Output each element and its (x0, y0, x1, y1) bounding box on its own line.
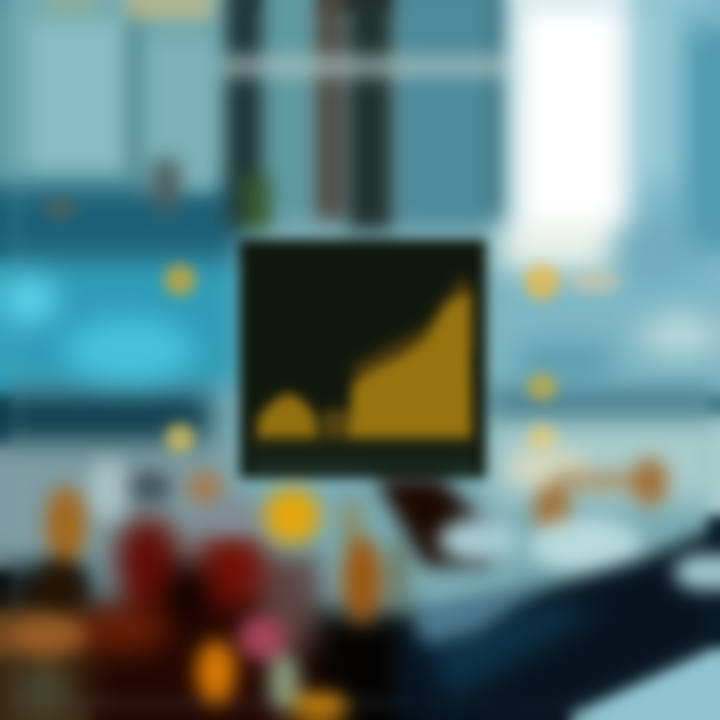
laptop (395, 525, 720, 720)
stand of chart screen (375, 478, 490, 566)
bottom left: colourful blurred objects (0, 516, 420, 720)
chart baseline (250, 442, 476, 448)
yellow markers (44, 198, 621, 453)
window columns (30, 0, 505, 230)
panel: dark chart screen (240, 240, 486, 478)
chart: rising yellow bars (322, 275, 474, 438)
tan objects on desk (438, 448, 668, 573)
bright window (2, 0, 720, 382)
chart: small bar hump (256, 393, 318, 438)
